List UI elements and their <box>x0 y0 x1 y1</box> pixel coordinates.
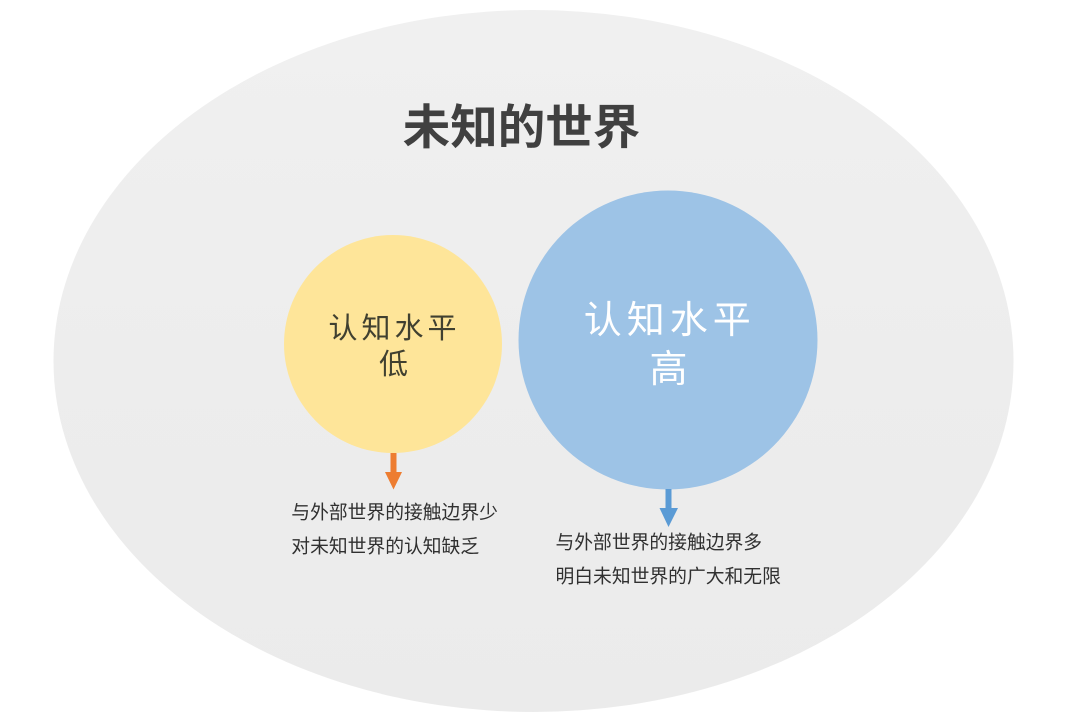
title: 未知的世界 <box>403 102 640 155</box>
text block: low cognition description: 与外部世界的接触边界少 <box>291 502 498 522</box>
text block: low cognition description: 对未知世界的认知缺乏 <box>291 536 479 556</box>
text block: high cognition description: 与外部世界的接触边界多 <box>556 532 762 552</box>
label: high cognition level: 高 <box>649 349 688 391</box>
label: low cognition level: 认知水平 <box>328 312 460 345</box>
panel: low cognition circle <box>284 235 502 453</box>
text block: high cognition description: 明白未知世界的广大和无限 <box>556 566 781 586</box>
label: high cognition level: 认知水平 <box>584 300 756 342</box>
label: low cognition level: 低 <box>379 348 408 381</box>
panel: high cognition circle <box>518 190 818 490</box>
arrow: orange down arrow <box>385 453 402 490</box>
arrow: blue down arrow <box>660 489 678 527</box>
